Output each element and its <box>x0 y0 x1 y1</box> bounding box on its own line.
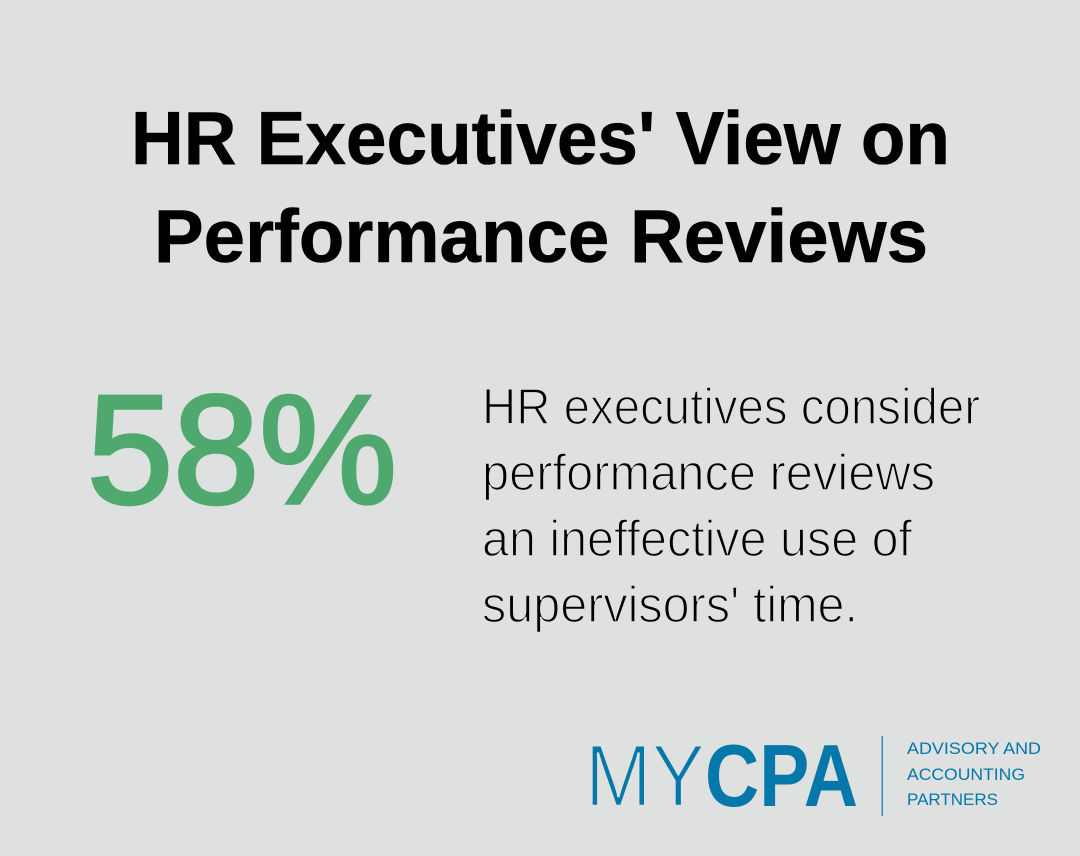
logo divider <box>882 736 883 816</box>
logo tagline <box>907 740 1041 809</box>
logo tagline: PARTNERS <box>907 791 998 809</box>
description text: performance reviews <box>482 444 935 501</box>
logo tagline: ADVISORY AND <box>907 740 1041 758</box>
title: HR Executives' View on <box>131 96 950 180</box>
description text: HR executives consider <box>482 378 980 435</box>
description text <box>482 378 980 633</box>
statistic: 58%: 58% <box>87 363 397 536</box>
logo: MyCPA <box>585 726 1041 825</box>
title: Performance Reviews <box>154 194 928 278</box>
title <box>131 96 950 278</box>
logo wordmark: MY <box>585 726 705 825</box>
logo wordmark: CPA <box>705 726 858 825</box>
description text: supervisors' time. <box>482 576 858 633</box>
logo wordmark <box>585 726 858 825</box>
description text: an ineffective use of <box>482 510 913 567</box>
logo tagline: ACCOUNTING <box>907 766 1025 784</box>
